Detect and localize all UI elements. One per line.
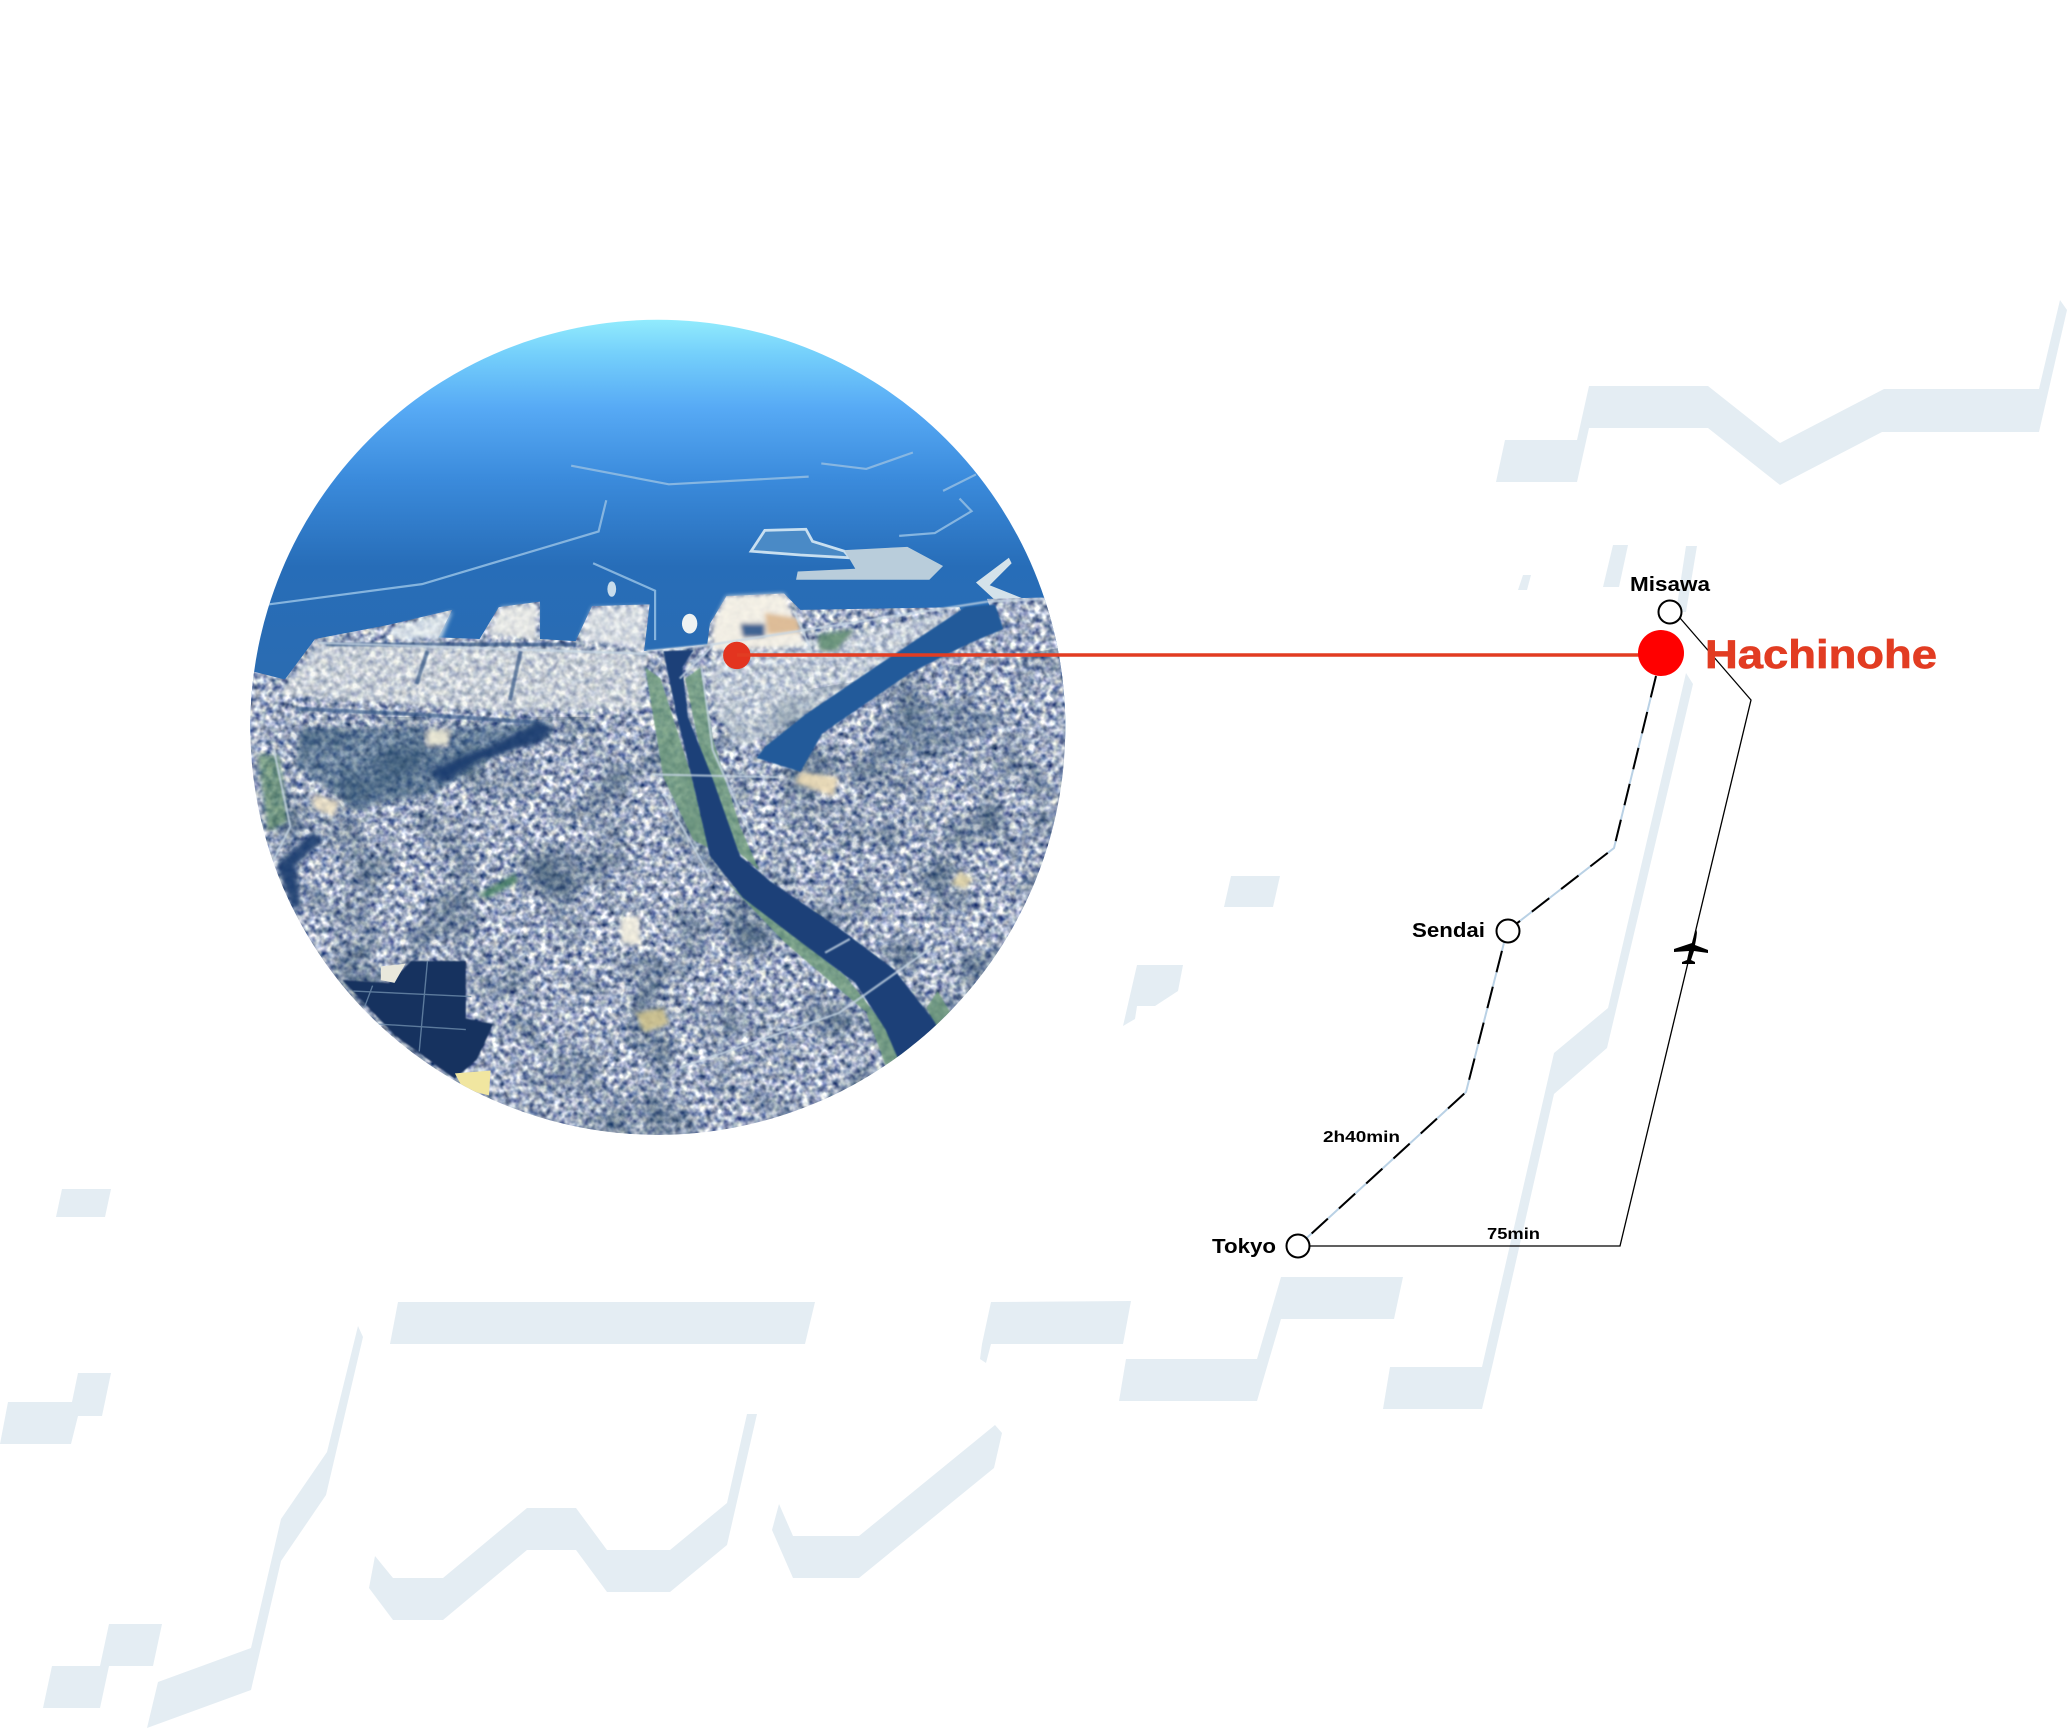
label: Misawa: Misawa bbox=[1630, 574, 1711, 596]
canal: industrial waterway bbox=[757, 604, 1003, 772]
node: Tokyo bbox=[1286, 1234, 1310, 1258]
rice paddies bbox=[342, 961, 493, 1095]
map shape: long coastal strip lower bbox=[1383, 673, 1693, 1409]
offshore island and port bbox=[607, 529, 1031, 633]
land: city texture bbox=[250, 594, 1066, 1135]
map shape: centre block bbox=[980, 1301, 1131, 1363]
icon: airplane bbox=[1674, 930, 1708, 964]
map shape: middle blocks bbox=[1123, 876, 1280, 1026]
land tone: light port and industry bbox=[257, 593, 1014, 1032]
map shape: V band bbox=[772, 1425, 1002, 1578]
land: darker city blotches bbox=[258, 648, 1066, 1135]
air route: Tokyo to Misawa bbox=[1310, 618, 1751, 1246]
map shape: stepped block bbox=[1119, 1277, 1403, 1401]
label: Sendai: Sendai bbox=[1412, 920, 1485, 942]
sea bbox=[250, 320, 1066, 739]
map shape: small slivers near Misawa bbox=[1518, 545, 1628, 590]
aerial photo of Hachinohe in a circle bbox=[230, 300, 1108, 1178]
canals and ponds west bbox=[277, 722, 554, 912]
green belts along river bbox=[645, 667, 954, 1065]
map shape: left strip bbox=[147, 1326, 363, 1728]
label: Hachinohe: Hachinohe bbox=[1705, 633, 1937, 677]
photo marker bbox=[723, 642, 751, 669]
map shape: top right band bbox=[1496, 300, 2067, 485]
dark roads across the port district bbox=[296, 644, 576, 722]
node: Misawa bbox=[1658, 600, 1682, 624]
breakwaters bbox=[268, 452, 976, 640]
label: rail time: 2h40min bbox=[1323, 1129, 1400, 1146]
node: Hachinohe bbox=[1638, 630, 1684, 676]
connector line from photo marker to Hachinohe bbox=[737, 653, 1661, 657]
label: air time: 75min bbox=[1487, 1226, 1540, 1243]
river: Mabechi bbox=[663, 650, 943, 1068]
map shape: long bar bbox=[390, 1302, 815, 1344]
node: Sendai bbox=[1496, 920, 1520, 942]
map shape: left small blocks bbox=[0, 1189, 162, 1708]
map shape: W band bbox=[369, 1414, 757, 1620]
map shape: long coastal strip bbox=[1676, 546, 1697, 612]
roads bbox=[274, 599, 1042, 1068]
rail route: Hachinohe to Sendai to Tokyo bbox=[1298, 676, 1656, 1246]
label: Tokyo: Tokyo bbox=[1212, 1236, 1276, 1258]
